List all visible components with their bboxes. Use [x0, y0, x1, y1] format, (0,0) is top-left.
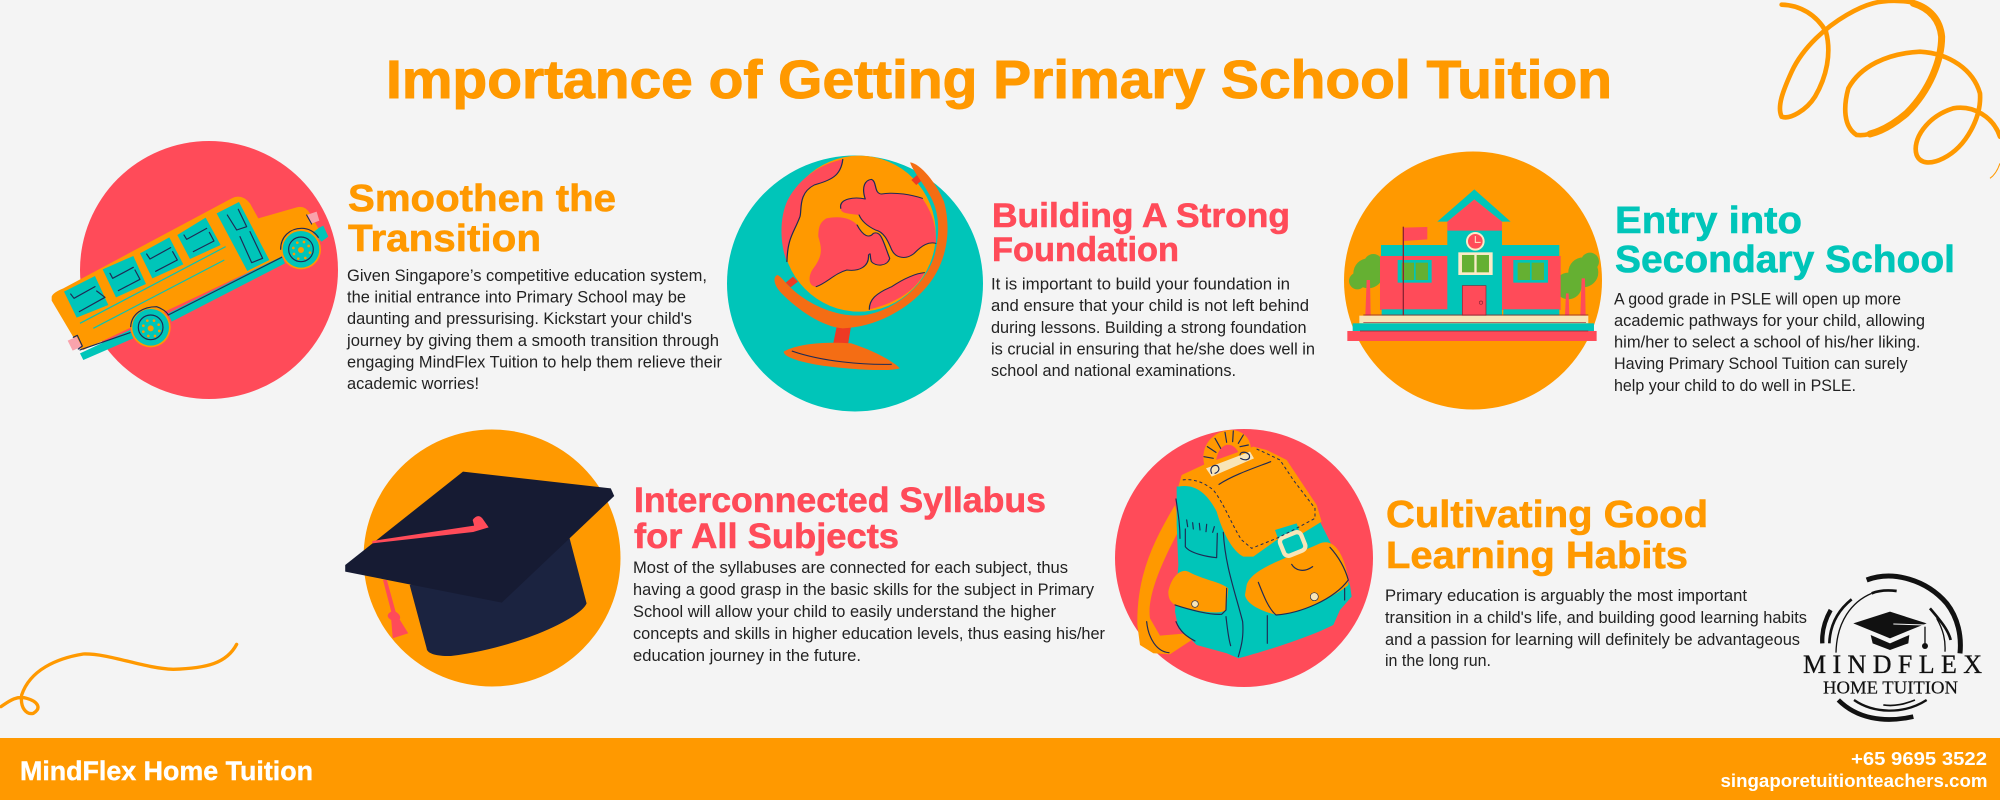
heading: Secondary School	[1615, 239, 1955, 281]
body text	[346, 267, 722, 393]
circle backdrop: orange	[1344, 152, 1602, 410]
heading: Building A Strong	[992, 197, 1290, 235]
body text: and ensure that your child is not left behind	[991, 297, 1309, 315]
logo: MindFlex Home Tuition	[1803, 576, 1982, 719]
body text: journey by giving them a smooth transition through	[346, 332, 719, 350]
body text: Most of the syllabuses are connected for each subject, thus	[633, 559, 1068, 577]
body text: transition in a child's life, and building good learning habits	[1385, 609, 1807, 627]
heading: Cultivating Good	[1386, 494, 1708, 536]
heading: Entry into	[1615, 200, 1802, 242]
footer brand name: MindFlex Home Tuition	[20, 756, 313, 786]
heading: Foundation	[992, 231, 1179, 269]
icon: logo rings and cap	[1822, 576, 1960, 719]
circle backdrop: teal	[727, 156, 983, 412]
body text: him/her to select a school of his/her liking.	[1614, 334, 1920, 352]
body text: engaging MindFlex Tuition to help them relieve their	[347, 354, 722, 372]
heading	[634, 481, 1046, 556]
circle backdrop: orange	[364, 430, 620, 686]
body text: Primary education is arguably the most important	[1385, 587, 1747, 605]
heading: Interconnected Syllabus	[634, 481, 1046, 520]
body text: School will allow your child to easily understand the higher	[633, 603, 1056, 621]
heading: Learning Habits	[1386, 535, 1688, 577]
body text	[991, 276, 1315, 380]
heading	[992, 197, 1290, 269]
body text: having a good grasp in the basic skills for the subject in Primary	[633, 581, 1095, 599]
body text: A good grade in PSLE will open up more	[1614, 290, 1901, 308]
panel: interconnected syllabus	[345, 430, 1105, 686]
decorative scribble: bottom left	[1, 644, 237, 714]
body text: It is important to build your foundation in	[991, 276, 1290, 294]
body text: help your child to do well in PSLE.	[1614, 377, 1856, 395]
body text: school and national examinations.	[991, 362, 1236, 380]
body text	[633, 559, 1105, 665]
panel: cultivating good learning habits	[1115, 429, 1807, 687]
circle backdrop: red	[1115, 429, 1373, 687]
heading	[1386, 494, 1708, 577]
heading	[1615, 200, 1955, 281]
panel: entry into secondary school	[1344, 152, 1955, 410]
icon: school building	[1347, 189, 1599, 341]
body text	[1614, 290, 1925, 395]
body text: in the long run.	[1385, 652, 1491, 670]
body text: Given Singapore’s competitive education system,	[347, 267, 707, 285]
heading	[348, 178, 616, 260]
title: Importance of Getting Primary School Tuition	[386, 50, 1612, 110]
footer bar	[0, 738, 2000, 800]
body text: and a passion for learning will definitely be advantageous	[1385, 631, 1800, 649]
footer contact: singaporetuitionteachers.com	[1720, 770, 1988, 791]
body text: academic worries!	[347, 375, 479, 393]
body text: Having Primary School Tuition can surely	[1614, 355, 1908, 373]
icon: globe	[774, 156, 948, 370]
panel: building a strong foundation	[727, 156, 1315, 412]
decorative scribble: top right	[1780, 1, 2000, 178]
panel: smoothen the transition	[52, 141, 722, 399]
logo wordmark: MINDFLEX	[1803, 650, 1982, 679]
circle backdrop: red	[80, 141, 338, 399]
body text: daunting and pressurising. Kickstart your child's	[347, 310, 692, 328]
heading: Smoothen the	[348, 178, 616, 220]
footer contact: +65 9695 3522	[1851, 748, 1987, 769]
body text: is crucial in ensuring that he/she does well in	[991, 340, 1315, 358]
body text	[1385, 587, 1807, 670]
icon: backpack	[1137, 430, 1352, 658]
body text: the initial entrance into Primary School may be	[347, 288, 686, 306]
body text: concepts and skills in higher education levels, thus easing his/her	[633, 625, 1105, 643]
icon: school bus	[52, 197, 328, 360]
heading: for All Subjects	[634, 517, 899, 556]
body text: education journey in the future.	[633, 647, 861, 665]
icon: graduation cap	[345, 472, 614, 656]
body text: academic pathways for your child, allowing	[1614, 312, 1925, 330]
heading: Transition	[348, 218, 541, 260]
body text: during lessons. Building a strong foundation	[991, 319, 1306, 337]
footer contact	[1720, 748, 1988, 791]
logo tagline: HOME TUITION	[1823, 678, 1958, 698]
